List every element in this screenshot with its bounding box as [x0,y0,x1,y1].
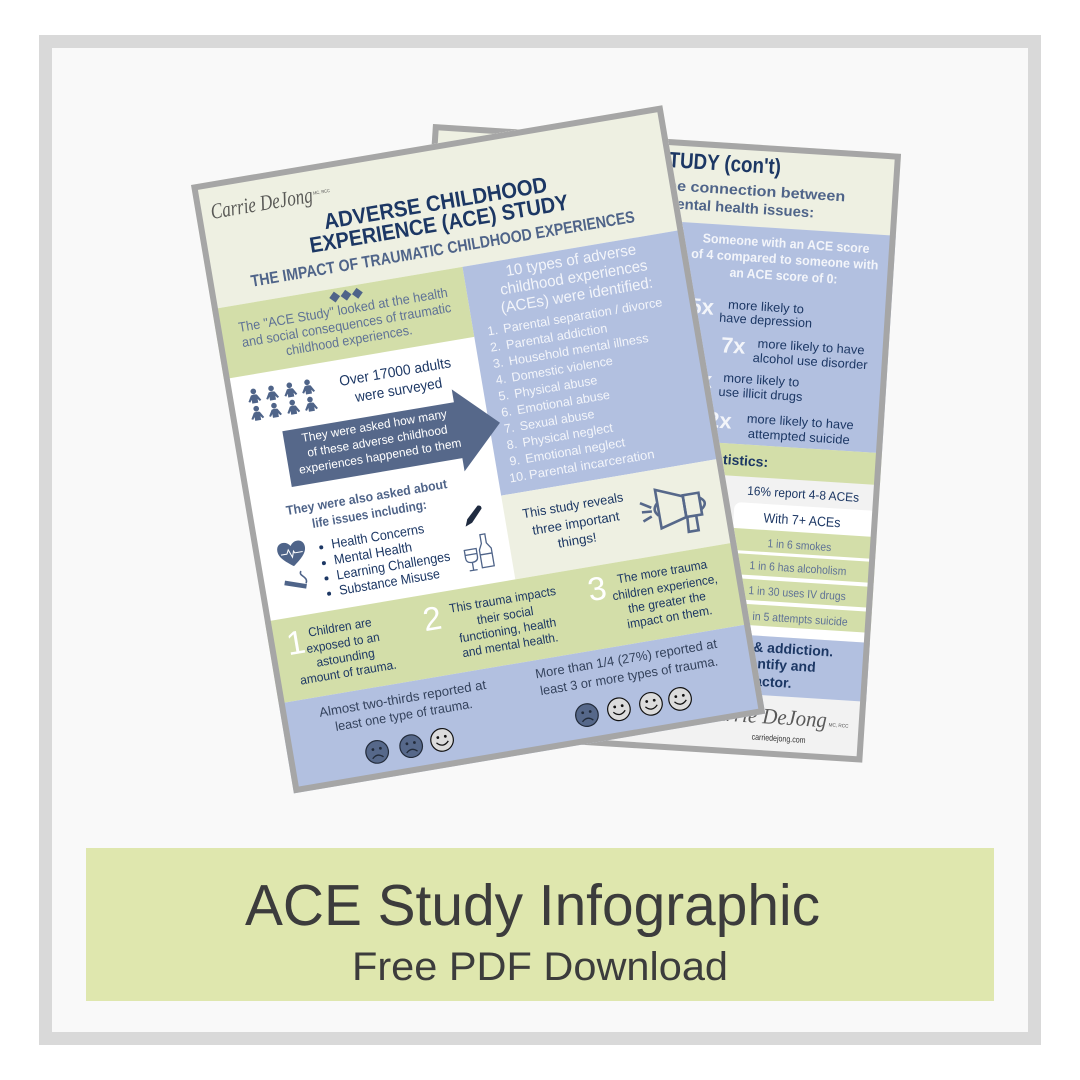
back page footer signature: MC, RCC [828,722,849,730]
arrow callout: of these adverse childhood [306,422,448,460]
back page likelihood panel: use illicit drugs [718,385,803,404]
panel: back page [394,124,901,763]
numbered list: 1. [486,323,499,338]
back page header [428,124,901,236]
statistic: more than a quarter: least 3 or more types of trauma. [539,653,719,698]
statistic: more than a quarter: More than 1/4 (27%) reported at [534,636,718,681]
finding 3: impact on them. [626,603,713,631]
arrow callout: experiences happened to them [298,436,462,477]
front page border [194,109,762,790]
list heading: childhood experiences [499,257,649,299]
back page header: ACE STUDY (con't) [611,143,782,179]
finding 2: their social [476,604,534,627]
bullet list: Mental Health [333,539,413,567]
numbered list: 7. [503,421,516,436]
back page likelihood panel: alcohol use disorder [752,351,868,372]
back page likelihood panel: Someone with an ACE score [702,230,870,256]
subtitle: THE IMPACT OF TRAUMATIC CHILDHOOD EXPERIENCES [249,208,636,291]
signature logo: MC, RCC [313,188,331,196]
back page statistics rows: 1 in 5 attempts suicide [743,610,848,629]
back page footer signature: Carrie DeJong [701,699,828,732]
list heading: 10 types of adverse [504,241,637,280]
back page footer signature [700,699,850,748]
numbered list: 2. [489,339,502,355]
back page likelihood panel: more likely to have [746,412,854,432]
statistic: two thirds: Almost two-thirds reported at [318,677,488,720]
back page likelihood panel: more likely to have [757,337,865,357]
finding 2: This trauma impacts [448,584,557,616]
title: EXPERIENCE (ACE) STUDY [308,189,570,258]
finding 2: functioning, health [458,615,557,645]
back page likelihood panel [414,206,896,453]
finding 1: 1 [284,623,308,662]
statistic: two thirds: least one type of trauma. [334,696,474,734]
back page statistics heading: ACE Statistics: [667,448,769,470]
intro band [212,267,474,379]
finding 3: The more trauma [616,557,708,586]
finding 3: 3 [585,569,609,608]
finding 2 [420,579,565,666]
numbered list: 6. [500,404,513,420]
numbered list: Emotional neglect [524,435,627,466]
life issues block: life issues including: [311,497,428,531]
back page footer signature: carriedejong.com [751,732,806,745]
callout: three important things: things! [557,529,598,551]
finding 2: 2 [420,599,444,638]
list heading [494,239,654,317]
intro band: and social consequences of traumatic [241,300,453,350]
back page conclusion: protective factor. [679,668,792,691]
statistic: more than a quarter [534,636,727,734]
numbered list: Household mental illness [508,331,650,368]
back page statistics rows: 1 in 6 has alcoholism [749,560,847,578]
numbered list: 9. [508,453,521,469]
back page conclusion [398,613,870,702]
life issues block: They were also asked about [285,476,449,518]
list heading: (ACEs) were identified: [500,274,654,317]
back page likelihood panel: 12x [694,406,733,434]
front page header [191,105,683,309]
survey block: were surveyed [353,376,443,406]
back page border [397,127,898,759]
callout: three important things: three important [531,508,621,538]
numbered list: Physical abuse [513,373,598,401]
icon: cigarette [283,570,307,590]
back page likelihood panel: of 4 compared to someone with [691,246,879,273]
panel: three findings [265,542,750,704]
bullet list [318,518,454,600]
panel: front page [191,105,765,793]
numbered list: Parental addiction [505,321,608,352]
numbered list: 5. [497,388,510,404]
callout: three important things: This study reveals [521,489,625,521]
callout: three important things [501,458,736,579]
back page header: The ACE Study reveals the connection between [481,166,846,205]
numbered list: Domestic violence [510,354,614,385]
finding 1: astounding [315,646,376,670]
finding 1: amount of trauma. [299,658,398,688]
icon: wine and bottle [462,533,494,571]
finding 3: the greater the [627,589,707,616]
back page statistics rows: 16% report 4-8 ACEs [747,484,860,505]
finding 1: Children are [307,615,373,640]
statistic: two thirds [318,677,496,771]
intro band: childhood experiences. [285,322,413,358]
numbered list: 10. [508,469,528,485]
numbered list: Parental incarceration [528,447,656,482]
back page statistics rows: 1 in 6 smokes [767,538,832,554]
survey block: Over 17000 adults [338,355,452,390]
banner subtitle: Free PDF Download [352,945,728,989]
finding 1: exposed to an [305,630,381,656]
life issues block [270,471,495,607]
arrow callout: They were asked how many [301,407,448,445]
back page likelihood panel: more likely to [723,371,800,390]
back page likelihood panel: attempted suicide [747,427,850,447]
bullet list: Substance Misuse [338,566,441,598]
back page statistics rows: 1 in 30 uses IV drugs [748,585,846,603]
numbered list: Emotional abuse [516,388,611,417]
back page likelihood panel: more likely to [728,298,804,316]
numbered list: Sexual abuse [519,407,596,433]
numbered list: 8. [506,437,518,452]
banner [86,848,994,1001]
finding 3 [585,550,724,637]
back page header: ACEs and physical & mental health issues: [510,186,815,221]
intro band: The "ACE Study" looked at the health [237,285,449,335]
finding 2: and mental health. [461,630,559,660]
back page statistics rows: With 7+ ACEs [763,510,841,530]
icon: diamonds [328,287,364,303]
back page conclusion: ACEs are linked to trauma & addiction. [575,627,834,660]
back page likelihood panel: 3x [687,366,714,393]
back page likelihood panel: have depression [719,311,813,331]
back page likelihood panel: an ACE score of 0: [729,265,838,287]
finding 1 [284,608,398,689]
survey block [246,355,455,424]
panel: trauma statistics [279,624,765,793]
icon: heart [276,539,308,568]
back page likelihood panel: 5x [689,293,715,320]
arrow callout [280,382,507,500]
bullet list: Learning Challenges [335,549,451,583]
back page conclusion: It is important to identify and [623,647,816,675]
back page likelihood panel: 7x [720,332,747,359]
numbered list [483,295,688,485]
numbered list: 4. [495,372,507,387]
bullet list: Health Concerns [330,521,426,552]
panel: ten types list [462,230,722,496]
back page statistics rows [726,483,879,643]
back page statistics heading [412,423,882,485]
numbered list: Physical neglect [521,421,615,450]
title: ADVERSE CHILDHOOD [322,172,549,234]
icon: megaphone [638,482,709,539]
finding 3: children experience, [611,572,719,603]
icon: pen [463,504,483,528]
numbered list: 3. [492,355,505,371]
icon: people [246,378,318,421]
signature logo: Carrie DeJong [209,182,314,224]
numbered list: Parental separation / divorce [502,295,663,336]
banner title: ACE Study Infographic [245,873,820,938]
